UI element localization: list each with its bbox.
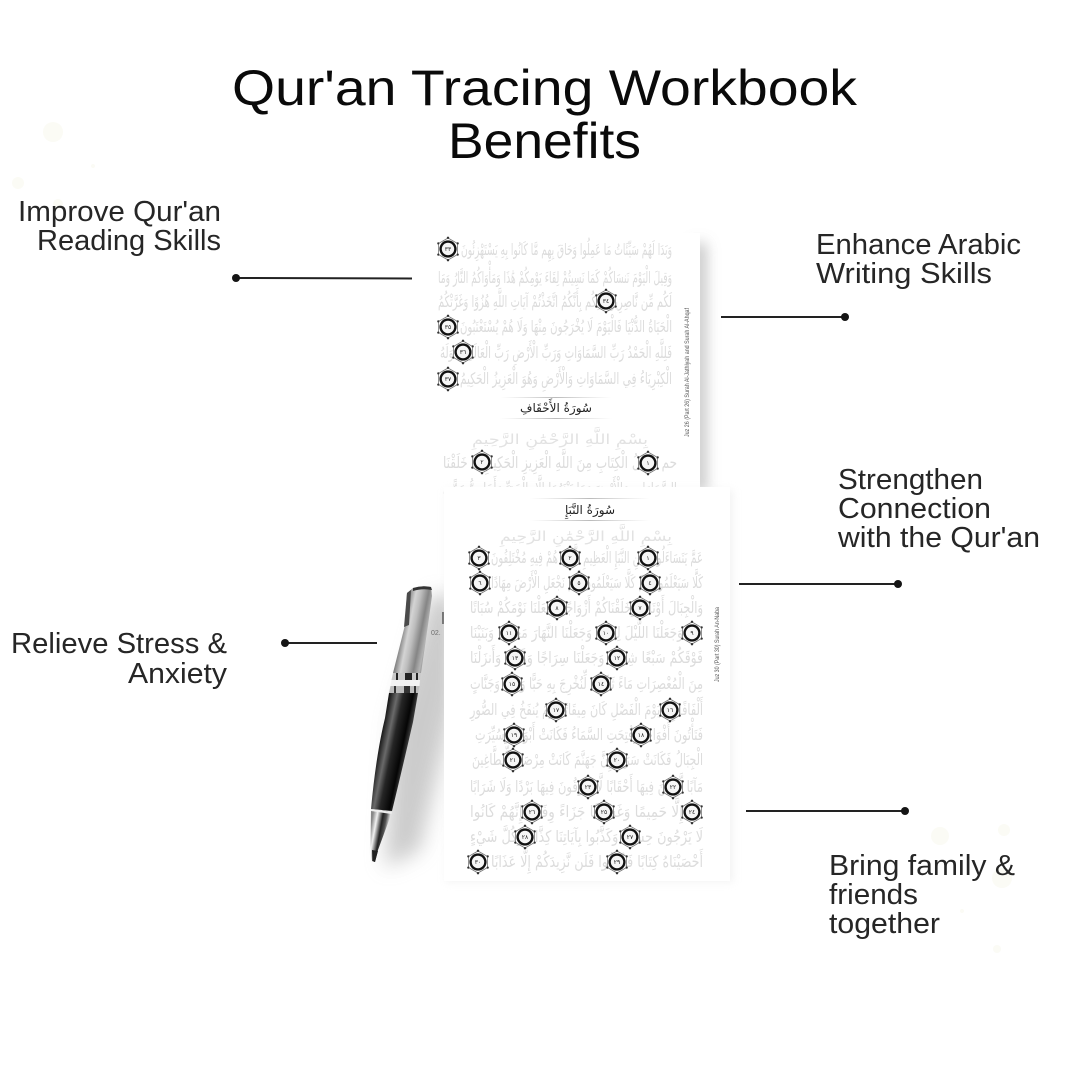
surah heading, front page: سُورَةُ النَّبَإِ bbox=[565, 502, 615, 520]
callout line: enhance writing bbox=[721, 313, 849, 321]
verse medallions, back page: ٢ bbox=[480, 459, 484, 466]
Arabic tracing lines, front page: إِلَّا حَمِيمًا وَغَسَّاقًا جَزَاءً وِفَاقًا إِنَّهُمْ كَانُوا bbox=[470, 796, 684, 824]
label: improve reading bbox=[18, 196, 221, 257]
side caption, back page: Juz 26 (Part 26) Surah Al-Jathiyah and Surah Al-Ahqaf bbox=[685, 308, 691, 437]
Arabic tracing lines, front page: أَلْفَافًا إِنَّ يَوْمَ الْفَصْلِ كَانَ مِيقَاتًا يَوْمَ يُنفَخُ فِي الصُّورِ bbox=[469, 696, 704, 722]
verse medallions, front page: ٥ bbox=[577, 580, 581, 587]
callout line: relieve stress bbox=[281, 639, 377, 647]
label: bring family: friends bbox=[829, 879, 918, 911]
page fragments: 02. bbox=[431, 630, 441, 637]
title: Qur'an Tracing Workbook bbox=[232, 60, 858, 116]
verse medallions, back page: ٣٦ bbox=[460, 349, 466, 356]
Arabic tracing lines, front page: مَآبًا لَّابِثِينَ فِيهَا أَحْقَابًا لَّا يَذُوقُونَ فِيهَا بَرْدًا وَلَا شَرَابًا bbox=[470, 771, 703, 798]
icon: pen bbox=[370, 586, 432, 862]
verse medallions, front page: ٨ bbox=[555, 605, 559, 612]
verse medallions, front page: ٢٥ bbox=[601, 809, 607, 816]
verse medallions, front page: ٢ bbox=[568, 555, 572, 562]
label: improve reading: Improve Qur'an bbox=[18, 196, 221, 228]
Arabic tracing lines, front page: الْجِبَالُ فَكَانَتْ سَرَابًا إِنَّ جَهَنَّمَ كَانَتْ مِرْصَادًا لِّلطَّاغِينَ bbox=[472, 744, 703, 772]
side caption, front page: Juz 30 (Part 30) Surah An-Naba bbox=[715, 606, 721, 682]
label: strengthen connection: with the Qur'an bbox=[837, 522, 1040, 554]
label: bring family bbox=[829, 850, 1015, 940]
verse medallions, front page: ٢٩ bbox=[614, 859, 620, 866]
label: enhance writing bbox=[816, 229, 1021, 290]
verse medallions, front page bbox=[467, 546, 703, 874]
basmala, back page: بِسْمِ اللَّهِ الرَّحْمَٰنِ الرَّحِيمِ bbox=[471, 427, 649, 450]
title bbox=[232, 60, 858, 169]
verse medallions, front page: ١٧ bbox=[553, 707, 560, 714]
verse medallions, front page: ١ bbox=[646, 555, 650, 562]
label: enhance writing: Writing Skills bbox=[816, 258, 992, 290]
Arabic tracing lines, back page: وَبَدَا لَهُمْ سَيِّئَاتُ مَا عَمِلُوا وَحَاقَ بِهِم مَّا كَانُوا بِهِ يَسْتَهْزِئُونَ bbox=[461, 237, 672, 263]
background speckles bbox=[12, 122, 1012, 953]
label: enhance writing: Enhance Arabic bbox=[816, 229, 1021, 261]
callout line: strengthen connection bbox=[739, 580, 902, 588]
verse medallions, front page: ١٦ bbox=[667, 707, 673, 714]
verse medallions, front page: ١٥ bbox=[509, 681, 515, 688]
verse medallions, front page: ٢١ bbox=[510, 757, 516, 764]
verse medallions, front page: ٧ bbox=[638, 605, 642, 612]
Arabic tracing lines, front page bbox=[469, 542, 704, 874]
label: strengthen connection: Connection bbox=[838, 493, 991, 525]
Arabic tracing lines, back page: فَلِلَّهِ الْحَمْدُ رَبِّ السَّمَاوَاتِ وَرَبِّ الْأَرْضِ رَبِّ الْعَالَمِينَ وَلَهُ bbox=[440, 337, 672, 366]
verse medallions, front page: ١٤ bbox=[598, 681, 604, 688]
verse medallions, front page: ١٣ bbox=[512, 655, 519, 662]
label: strengthen connection: Strengthen bbox=[838, 464, 983, 496]
basmala, front page: بِسْمِ اللَّهِ الرَّحْمَٰنِ الرَّحِيمِ bbox=[499, 524, 673, 547]
Arabic tracing lines, back page: حم تَنزِيلُ الْكِتَابِ مِنَ اللَّهِ الْعَزِيزِ الْحَكِيمِ مَا خَلَقْنَا bbox=[443, 447, 677, 476]
Arabic tracing lines, front page: وَالْجِبَالَ أَوْتَادًا وَخَلَقْنَاكُمْ أَزْوَاجًا وَجَعَلْنَا نَوْمَكُمْ سُبَاتًا bbox=[470, 594, 703, 619]
verse medallions, front page: ٢٢ bbox=[670, 784, 676, 791]
Arabic tracing lines, back page: الْحَيَاةُ الدُّنْيَا فَالْيَوْمَ لَا يُخْرَجُونَ مِنْهَا وَلَا هُمْ يُسْتَعْتَبُونَ bbox=[460, 314, 672, 337]
Arabic tracing lines, front page: أَحْصَيْنَاهُ كِتَابًا فَذُوقُوا فَلَن نَّزِيدَكُمْ إِلَّا عَذَابًا bbox=[491, 846, 704, 874]
Arabic tracing lines, front page: مِنَ الْمُعْصِرَاتِ مَاءً ثَجَّاجًا لِّنُخْرِجَ بِهِ حَبًّا وَنَبَاتًا وَجَنَّاتٍ bbox=[470, 668, 703, 696]
label: relieve stress bbox=[11, 628, 228, 690]
Arabic tracing lines, back page: وَقِيلَ الْيَوْمَ نَنسَاكُمْ كَمَا نَسِيتُمْ لِقَاءَ يَوْمِكُمْ هَٰذَا وَمَأْوَاكُمُ النَّارُ وَمَا bbox=[438, 261, 672, 288]
verse medallions, front page: ٢٧ bbox=[627, 834, 634, 841]
verse medallions, back page: ٣٤ bbox=[603, 298, 609, 305]
verse medallions, front page: ٢٦ bbox=[529, 809, 535, 816]
title: Benefits bbox=[448, 113, 641, 169]
label: relieve stress: Anxiety bbox=[128, 658, 228, 690]
Arabic tracing lines, front page: كَلَّا سَيَعْلَمُونَ ثُمَّ كَلَّا سَيَعْلَمُونَ أَلَمْ نَجْعَلِ الْأَرْضَ مِهَادًا bbox=[491, 567, 703, 595]
Arabic tracing lines, back page: الْكِبْرِيَاءُ فِي السَّمَاوَاتِ وَالْأَرْضِ وَهُوَ الْعَزِيزُ الْحَكِيمُ bbox=[460, 366, 672, 392]
verse medallions, front page: ٤ bbox=[648, 580, 652, 587]
Arabic tracing lines, front page: فَوْقَكُمْ سَبْعًا شِدَادًا وَجَعَلْنَا سِرَاجًا وَهَّاجًا وَأَنزَلْنَا bbox=[470, 644, 703, 668]
Arabic tracing lines, back page bbox=[438, 237, 677, 502]
callout line: improve reading bbox=[232, 274, 412, 282]
surah heading, back page: سُورَةُ الأَحْقَافِ bbox=[520, 398, 592, 416]
verse medallions, front page: ١٨ bbox=[638, 732, 645, 739]
verse medallions, back page: ٣٣ bbox=[445, 246, 452, 253]
panel: back workbook page (Surah Al-Ahqaf) bbox=[413, 233, 706, 873]
verse medallions, front page: ١٠ bbox=[603, 630, 609, 637]
panel: front workbook page (Surah An-Naba) bbox=[444, 487, 733, 882]
Arabic tracing lines, front page: فَتَأْتُونَ أَفْوَاجًا وَفُتِحَتِ السَّمَاءُ فَكَانَتْ أَبْوَابًا وَسُيِّرَتِ bbox=[475, 718, 703, 745]
Arabic tracing lines, back page: السَّمَاوَاتِ وَالْأَرْضَ وَمَا بَيْنَهُمَا إِلَّا بِالْحَقِّ وَأَجَلٍ مُّسَمًّى bbox=[443, 473, 677, 502]
verse medallions, front page: ١٢ bbox=[614, 655, 620, 662]
label: improve reading: Reading Skills bbox=[37, 225, 221, 257]
verse medallions, front page: ٢٠ bbox=[614, 757, 620, 764]
verse medallions, front page: ٦ bbox=[478, 580, 482, 587]
verse medallions, back page: ١ bbox=[646, 460, 650, 467]
label: strengthen connection bbox=[837, 464, 1040, 554]
verse medallions, front page: ١١ bbox=[506, 630, 512, 637]
pen shadow bbox=[385, 596, 460, 868]
verse medallions, front page: ٩ bbox=[690, 630, 694, 637]
label: bring family: together bbox=[829, 908, 941, 940]
verse medallions, front page: ٢٣ bbox=[585, 784, 592, 791]
verse medallions, front page: ٢٤ bbox=[689, 809, 695, 816]
verse medallions, front page: ٣٠ bbox=[475, 859, 481, 866]
Arabic tracing lines, front page: وَجَعَلْنَا اللَّيْلَ لِبَاسًا وَجَعَلْنَا النَّهَارَ مَعَاشًا وَبَنَيْنَا bbox=[470, 617, 683, 643]
verse medallions, front page: ٢٨ bbox=[522, 834, 529, 841]
Arabic tracing lines, front page: لَا يَرْجُونَ حِسَابًا وَكَذَّبُوا بِآيَاتِنَا كِذَّابًا وَكُلَّ شَيْءٍ bbox=[470, 824, 704, 848]
label: relieve stress: Relieve Stress & bbox=[11, 628, 227, 660]
callout line: bring family bbox=[746, 807, 909, 815]
verse medallions, back page bbox=[437, 237, 659, 475]
Arabic tracing lines, front page: عَمَّ يَتَسَاءَلُونَ عَنِ النَّبَإِ الْعَظِيمِ الَّذِي هُمْ فِيهِ مُخْتَلِفُونَ bbox=[491, 542, 703, 571]
verse medallions, front page: ٣ bbox=[477, 555, 481, 562]
label: bring family: Bring family & bbox=[829, 850, 1015, 882]
Arabic tracing lines, back page: لَكُم مِّن نَّاصِرِينَ ذَٰلِكُم بِأَنَّكُمُ اتَّخَذْتُمْ آيَاتِ اللَّهِ هُزُوًا وَغَرَّتْكُمُ bbox=[438, 286, 672, 314]
verse medallions, back page: ٣٥ bbox=[445, 324, 451, 331]
verse medallions, front page: ١٩ bbox=[511, 732, 517, 739]
verse medallions, back page: ٣٧ bbox=[445, 376, 452, 383]
